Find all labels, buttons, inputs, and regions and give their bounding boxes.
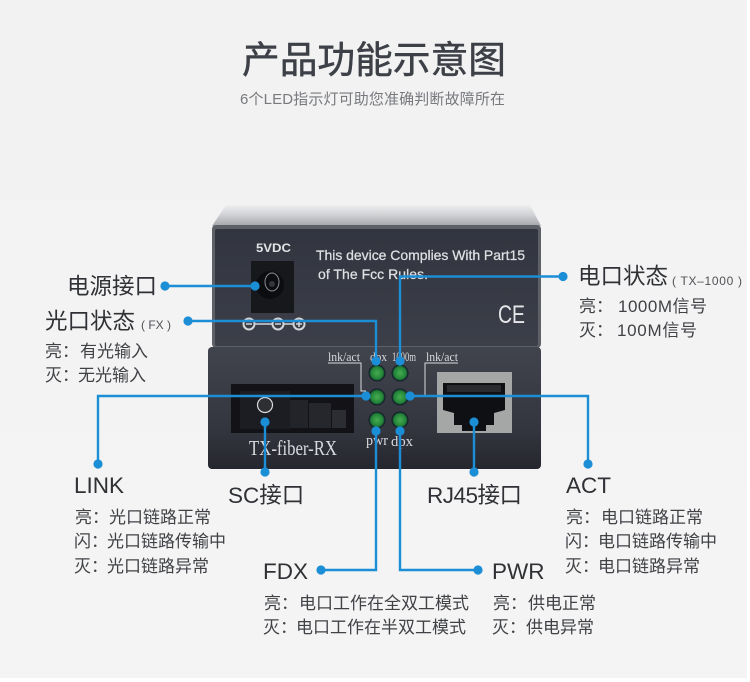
callout: FDX: FDX bbox=[263, 559, 308, 584]
callout: FDX: 灭： bbox=[263, 618, 297, 637]
callout: LINK: 灭： bbox=[74, 557, 108, 576]
device rear panel bbox=[212, 225, 541, 348]
label: SC port: SC接口 bbox=[228, 483, 304, 508]
connector: ACT bbox=[405, 391, 593, 469]
callout: electrical status: ( TX–1000 ) bbox=[672, 274, 742, 288]
label: 5VDC: 5VDC bbox=[256, 241, 291, 255]
callout: ACT: ACT bbox=[566, 473, 611, 498]
callout: LINK: LINK bbox=[74, 473, 124, 498]
SC fiber port bbox=[231, 384, 354, 433]
callout: optical status bbox=[45, 309, 171, 385]
callout: FDX: 亮： bbox=[264, 594, 298, 613]
label: TX-fiber-RX: TX-fiber-RX bbox=[249, 436, 337, 460]
callout: LINK bbox=[74, 473, 226, 576]
callout: electrical status bbox=[578, 264, 742, 340]
connector: optical status bbox=[183, 316, 381, 366]
callout: ACT: 闪： bbox=[565, 532, 599, 551]
callout: optical status: ( FX ) bbox=[141, 318, 171, 332]
callout: PWR: 供电异常 bbox=[526, 618, 594, 637]
connector: RJ45 port bbox=[469, 417, 479, 477]
callout: ACT bbox=[565, 473, 717, 576]
device: fiber media converter bbox=[208, 205, 541, 469]
RJ45 port bbox=[437, 372, 512, 433]
callout: LINK: 光口链路正常 bbox=[109, 508, 211, 527]
connector: PWR bbox=[395, 426, 483, 575]
callout: optical status: 光口状态 bbox=[45, 309, 135, 334]
connector: electrical status bbox=[395, 272, 568, 366]
device front panel bbox=[208, 347, 541, 469]
callout: LINK: 亮： bbox=[75, 508, 109, 527]
callout: PWR: 供电正常 bbox=[528, 594, 596, 613]
callout: electrical status: 电口状态 bbox=[578, 264, 668, 289]
callout: ACT: 亮： bbox=[566, 508, 600, 527]
callout: ACT: 电口链路正常 bbox=[601, 508, 703, 527]
LED indicators bbox=[369, 365, 408, 428]
callout: PWR: 亮： bbox=[493, 594, 527, 613]
LED labels: pwr bbox=[366, 433, 388, 449]
callout: FDX bbox=[263, 559, 469, 637]
title: 产品功能示意图 bbox=[242, 39, 506, 81]
LED labels bbox=[328, 350, 458, 450]
device rear panel: of The Fcc Rules. bbox=[318, 266, 428, 282]
callout: FDX: 电口工作在全双工模式 bbox=[299, 594, 469, 613]
LED labels: dpx bbox=[391, 434, 413, 450]
callout: PWR bbox=[492, 559, 596, 637]
callout: PWR: 灭： bbox=[492, 618, 526, 637]
subtitle: 6个LED指示灯可助您准确判断故障所在 bbox=[240, 90, 505, 108]
callout: LINK: 光口链路传输中 bbox=[107, 532, 226, 551]
compliance text: This device Complies With Part15 bbox=[316, 247, 525, 263]
label: power port: 电源接口 bbox=[67, 274, 157, 299]
connector: SC port bbox=[260, 417, 270, 477]
callout: optical status: 灭： bbox=[45, 366, 79, 385]
callout: electrical status: 100M信号 bbox=[617, 321, 697, 340]
callout: ACT: 电口链路异常 bbox=[598, 557, 700, 576]
connector: power port bbox=[160, 281, 260, 291]
callout: electrical status: 亮： bbox=[579, 297, 613, 316]
LED labels: lnk/act bbox=[328, 350, 360, 364]
callout: PWR: PWR bbox=[492, 559, 544, 584]
CE mark: CE bbox=[498, 301, 525, 329]
callout: optical status: 有光输入 bbox=[80, 342, 148, 361]
callout: electrical status: 1000M信号 bbox=[618, 297, 707, 316]
callout: LINK: 光口链路异常 bbox=[107, 557, 209, 576]
LED labels: dpx bbox=[370, 350, 388, 364]
callout: LINK: 闪： bbox=[74, 532, 108, 551]
device top face bbox=[212, 205, 541, 226]
callout: FDX: 电口工作在半双工模式 bbox=[296, 618, 466, 637]
callout: ACT: 灭： bbox=[565, 557, 599, 576]
LED labels: lnk/act bbox=[426, 350, 458, 364]
icon: power jack bbox=[251, 261, 294, 313]
polarity symbols bbox=[244, 318, 304, 330]
connector: FDX bbox=[316, 426, 381, 575]
callout: ACT: 电口链路传输中 bbox=[598, 532, 717, 551]
LED labels: 1000m bbox=[392, 350, 416, 364]
label: RJ45 port: RJ45接口 bbox=[427, 483, 522, 508]
callout: optical status: 无光输入 bbox=[78, 366, 146, 385]
callout: electrical status: 灭： bbox=[579, 321, 613, 340]
connector: LINK bbox=[93, 391, 371, 469]
callout: optical status: 亮： bbox=[45, 342, 79, 361]
